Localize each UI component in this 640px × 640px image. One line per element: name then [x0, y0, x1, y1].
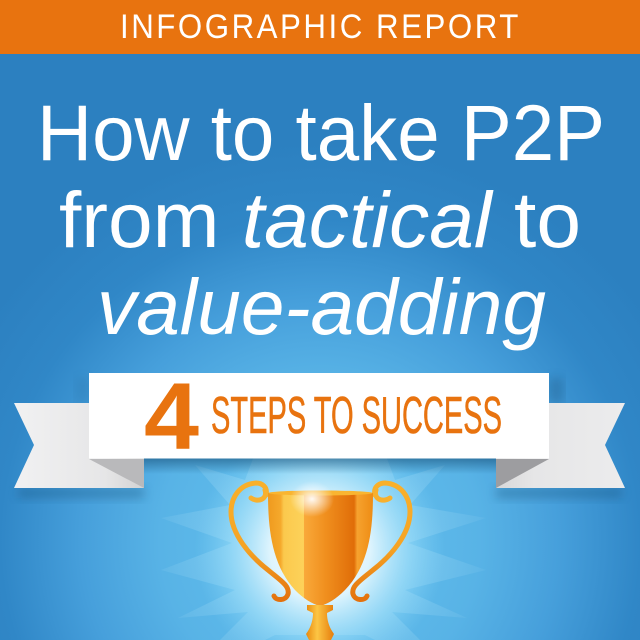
header text: INFOGRAPHIC REPORT	[120, 7, 518, 45]
left fold	[89, 459, 144, 488]
left handle	[231, 483, 288, 600]
sunburst rays	[161, 425, 486, 640]
header bar	[0, 0, 640, 54]
highlight	[290, 481, 334, 517]
icon: trophy	[231, 481, 410, 640]
cup	[268, 491, 373, 606]
ribbon	[14, 364, 625, 498]
stem	[306, 605, 334, 640]
left ribbon tail	[14, 403, 144, 488]
title line 2: from tactical to	[59, 175, 581, 264]
right fold	[496, 459, 549, 488]
rim	[268, 490, 372, 496]
title line 3: value-adding	[97, 262, 546, 351]
title	[37, 88, 605, 351]
ribbon banner	[89, 373, 549, 458]
right handle	[353, 483, 410, 600]
right ribbon tail	[496, 403, 625, 488]
title line 1: How to take P2P	[37, 88, 605, 177]
number 4: 4	[144, 364, 199, 470]
ribbon shadows	[18, 378, 622, 498]
